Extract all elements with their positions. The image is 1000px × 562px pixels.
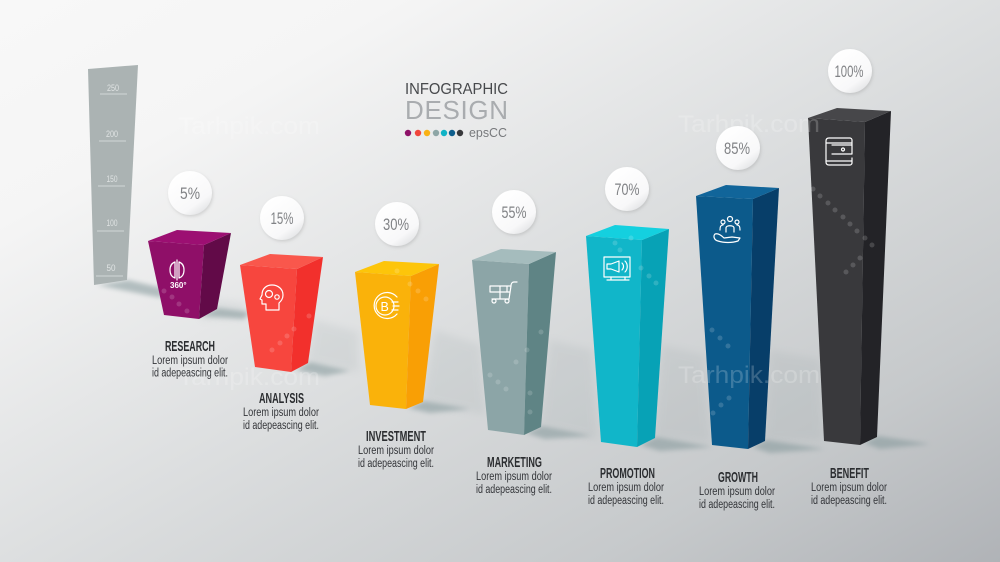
- badge: 70%: [605, 167, 649, 211]
- icon: bitcoin: [374, 292, 399, 318]
- bar: analysis: [240, 254, 323, 372]
- label: investment: INVESTMENT: [366, 428, 426, 445]
- badge: 55%: 55%: [502, 203, 526, 222]
- badge: 100%: 100%: [834, 62, 864, 81]
- ruler scale panel: 100: [106, 218, 118, 228]
- ruler scale panel: 200: [106, 129, 118, 139]
- label: promotion: id adepeascing elit.: [588, 495, 664, 507]
- label: benefit: BENEFIT: [830, 465, 869, 482]
- floor shadows: [97, 280, 930, 453]
- badge: 15%: 15%: [270, 209, 294, 228]
- label: growth: [699, 469, 775, 511]
- badge: 100%: [828, 49, 872, 93]
- label: benefit: Lorem ipsum dolor: [811, 482, 887, 494]
- label: analysis: ANALYSIS: [259, 390, 304, 407]
- label: benefit: id adepeascing elit.: [811, 495, 887, 507]
- badge: 85%: 85%: [724, 139, 750, 158]
- bar: promotion: [586, 225, 669, 447]
- title block: DESIGN: [405, 95, 508, 125]
- label: promotion: PROMOTION: [600, 465, 655, 482]
- title block: INFOGRAPHIC: [405, 81, 508, 98]
- label: analysis: [243, 390, 319, 432]
- label: research: RESEARCH: [165, 338, 215, 355]
- ruler scale panel: 250: [107, 83, 119, 93]
- label: marketing: id adepeascing elit.: [476, 484, 552, 496]
- watermarks: Tarhpik.com: [178, 364, 320, 391]
- label: analysis: Lorem ipsum dolor: [243, 407, 319, 419]
- bar: investment: [355, 261, 439, 409]
- watermarks: Tarhpik.com: [678, 362, 820, 389]
- icon: head with gears: [260, 285, 283, 310]
- bar: growth: [696, 185, 779, 449]
- badge: 5%: [168, 171, 212, 215]
- label: research: [152, 338, 228, 380]
- badge: 85%: [716, 126, 760, 170]
- badge: 5%: 5%: [180, 184, 200, 203]
- watermarks: Tarhpik.com: [678, 111, 820, 138]
- icon: 360: 360°: [170, 281, 187, 290]
- icon: wallet: [826, 138, 852, 165]
- icon: bitcoin: B: [380, 300, 389, 314]
- faint dotted trails: [162, 186, 874, 416]
- ruler scale panel: 50: [106, 263, 116, 273]
- watermarks: [178, 111, 820, 391]
- watermarks: Tarhpik.com: [178, 113, 320, 140]
- ruler scale panel: [88, 65, 138, 285]
- badge: 15%: [260, 196, 304, 240]
- soft wide shadows: [199, 300, 822, 442]
- title block: epsCC: [469, 126, 507, 140]
- bar: benefit: [808, 108, 891, 445]
- label: marketing: MARKETING: [487, 454, 542, 471]
- title block: [405, 81, 508, 140]
- label: promotion: Lorem ipsum dolor: [588, 482, 664, 494]
- badge: 55%: [492, 190, 536, 234]
- badge: 70%: 70%: [614, 180, 640, 199]
- ruler scale panel: 150: [106, 174, 118, 184]
- label: investment: id adepeascing elit.: [358, 458, 434, 470]
- label: marketing: [476, 454, 552, 496]
- label: investment: [358, 428, 434, 470]
- label: growth: Lorem ipsum dolor: [699, 486, 775, 498]
- icon: people on hand: [714, 216, 740, 242]
- label: growth: GROWTH: [718, 469, 758, 486]
- label: benefit: [811, 465, 887, 507]
- label: investment: Lorem ipsum dolor: [358, 445, 434, 457]
- label: research: Lorem ipsum dolor: [152, 355, 228, 367]
- label: promotion: [588, 465, 664, 507]
- icon: cart: [490, 282, 517, 303]
- label: research: id adepeascing elit.: [152, 368, 228, 380]
- label: growth: id adepeascing elit.: [699, 499, 775, 511]
- badge: 30%: [375, 202, 419, 246]
- label: analysis: id adepeascing elit.: [243, 420, 319, 432]
- icon: megaphone on screen: [604, 257, 630, 280]
- bar: marketing: [472, 249, 556, 435]
- badge: 30%: 30%: [383, 215, 409, 234]
- bar: research: [148, 230, 231, 319]
- label: marketing: Lorem ipsum dolor: [476, 471, 552, 483]
